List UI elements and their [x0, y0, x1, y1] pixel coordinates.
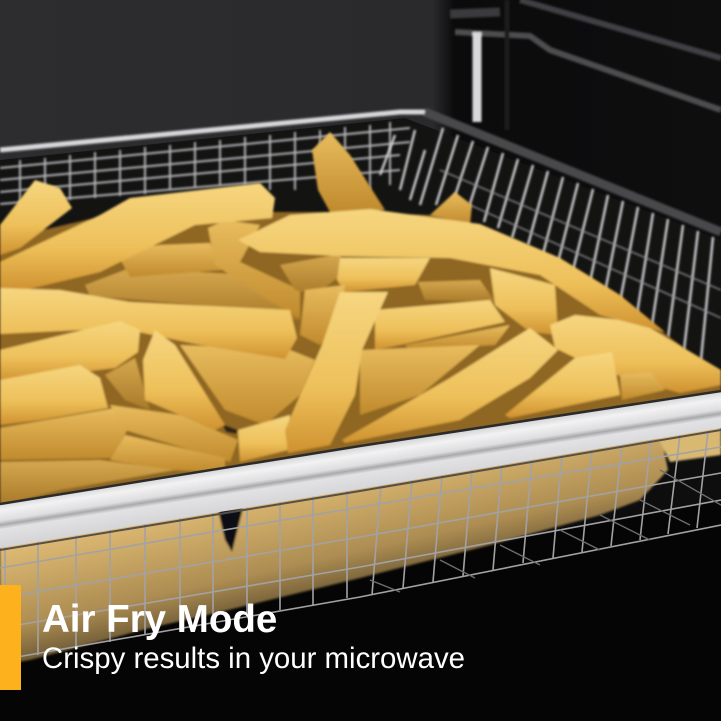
oven rack — [450, 0, 721, 130]
front rim — [0, 391, 721, 550]
front fries seen through mesh — [0, 422, 721, 665]
wires under the basket — [370, 470, 721, 592]
back fries — [312, 132, 385, 212]
accent bar — [0, 585, 21, 690]
fries base layer — [0, 212, 721, 508]
back mesh left — [0, 122, 410, 205]
dark gap — [222, 424, 238, 434]
back rim — [0, 112, 721, 232]
heading: Air Fry Mode — [42, 598, 277, 641]
basket interior — [0, 118, 721, 520]
back mesh right — [380, 128, 721, 360]
black floor — [0, 500, 721, 721]
gap in fries — [218, 508, 243, 552]
fries — [0, 132, 721, 508]
front mesh — [0, 431, 721, 662]
subheading: Crispy results in your microwave — [42, 642, 465, 675]
top fries — [0, 183, 275, 290]
